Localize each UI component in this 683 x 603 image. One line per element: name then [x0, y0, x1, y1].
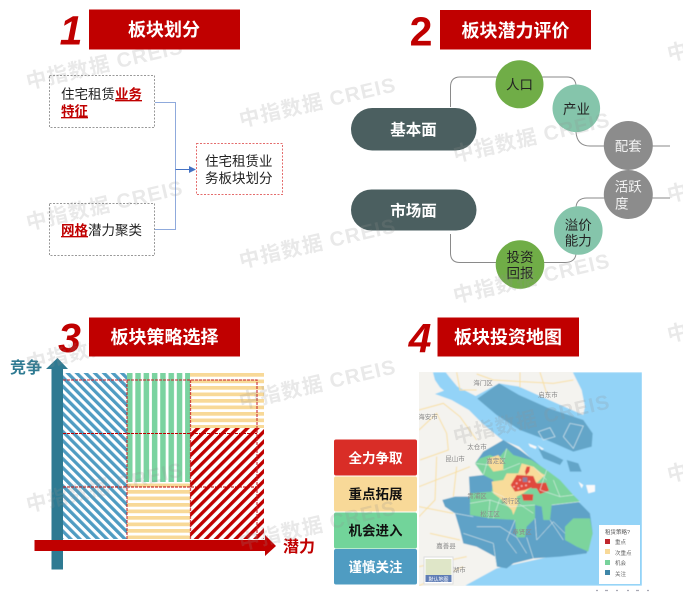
- box: 住宅租赁业务特征: 特征: [61, 103, 88, 119]
- legend button: 全力争取: 全力争取: [348, 450, 403, 466]
- map place labels: 昆山市: [445, 454, 465, 463]
- legend button: 机会进入: [334, 512, 417, 548]
- pill: 基本面: [351, 108, 476, 150]
- map legend: 租赁策略?: [605, 528, 630, 536]
- heading: 板块潜力评价: 板块潜力评价: [462, 21, 570, 41]
- inset: default map thumbnail: [424, 557, 453, 584]
- legend button: 谨慎关注: [334, 549, 417, 584]
- circle: 溢价能力: 溢价: [565, 218, 592, 233]
- box: 住宅租赁业务特征: [50, 76, 154, 128]
- circle: 配套: [604, 121, 653, 170]
- number 1: 1: [60, 8, 82, 54]
- map legend: [599, 525, 640, 584]
- circle: 投资回报: 投资: [506, 250, 534, 265]
- box: 住宅租赁业务板块划分: [196, 144, 282, 194]
- arrow: 竞争 axis: [46, 358, 68, 570]
- circle: 人口: [496, 60, 544, 108]
- watermark: 中指数据 CREIS: [451, 249, 612, 308]
- circle: 投资回报: [496, 240, 544, 289]
- panel: 4 板块投资地图: [334, 315, 658, 590]
- map legend: 次重点: [615, 549, 632, 557]
- watermark: 中指数据 CREIS: [237, 214, 398, 273]
- circle: 活跃度: 活跃: [615, 180, 642, 194]
- map place labels: 海门区: [473, 378, 493, 387]
- map place labels: 青浦区: [467, 491, 487, 500]
- watermark: 中指数据 CREIS: [451, 390, 612, 449]
- heading: 板块投资地图: 板块投资地图: [454, 328, 562, 348]
- panel: 1 板块划分: [50, 8, 282, 256]
- circle: 投资回报: 回报: [506, 266, 534, 281]
- pill: 市场面: [351, 190, 476, 230]
- map place labels: 奉贤区: [512, 527, 532, 536]
- legend button: 机会进入: 机会进入: [348, 522, 403, 538]
- panel: 3 板块策略选择: [10, 315, 315, 570]
- map place labels: 松江区: [480, 509, 500, 518]
- box: 住宅租赁业务板块划分: 务板块划分: [205, 171, 272, 186]
- legend button: 重点拓展: 重点拓展: [348, 486, 403, 502]
- watermark: 中指数据 CREIS: [237, 355, 398, 414]
- map place labels: 启东市: [538, 390, 558, 399]
- label: 潜力: 潜力: [283, 538, 315, 556]
- heading: 板块划分: 板块划分: [128, 20, 200, 40]
- watermark: 中指数据 CREIS: [24, 176, 185, 235]
- arrow: 潜力 axis: [34, 535, 276, 556]
- circle: 人口: 人口: [506, 78, 533, 92]
- heading: 板块划分: [89, 10, 240, 50]
- box: 住宅租赁业务特征: 住宅租赁业务: [61, 87, 142, 102]
- circle: 产业: 产业: [563, 102, 590, 117]
- heading: 板块策略选择: [89, 318, 240, 356]
- map place labels: 嘉定区: [486, 456, 506, 465]
- number 2: 2: [410, 8, 432, 54]
- circle: 配套: 配套: [615, 139, 642, 154]
- map legend: 关注: [615, 570, 627, 578]
- heading: 板块策略选择: 板块策略选择: [110, 328, 218, 348]
- map place labels: 嘉善县: [436, 541, 456, 550]
- circle: 活跃度: 度: [615, 196, 628, 212]
- watermark: 中指数据 CREIS: [24, 317, 185, 376]
- watermark: 中指数据 CREIS: [237, 496, 398, 555]
- watermark: 中指数据 CREIS: [24, 35, 185, 94]
- box: 住宅租赁业务板块划分: 住宅租赁业: [205, 154, 272, 169]
- cropped caption fragment: [596, 590, 658, 592]
- map place labels: 平湖市: [446, 565, 466, 574]
- panel: 2 板块潜力评价: [351, 8, 670, 289]
- map legend: 重点: [615, 538, 627, 546]
- box: 网格潜力聚类: 网格潜力聚类: [61, 222, 142, 238]
- inset: default map thumbnail: 默认地图: [428, 576, 449, 583]
- map place labels: 太仓市: [467, 442, 487, 451]
- box: 网格潜力聚类: [50, 204, 154, 256]
- arrow: connector to result: [155, 102, 196, 230]
- circle: 溢价能力: 能力: [565, 234, 592, 248]
- chart: strategy quadrant: [63, 373, 264, 539]
- circle: 产业: [552, 84, 600, 132]
- number 4: 4: [408, 315, 432, 361]
- map: Shanghai districts: [417, 370, 642, 587]
- map place labels: 闵行区: [501, 496, 521, 505]
- map place labels: [418, 378, 558, 574]
- legend button: 谨慎关注: 谨慎关注: [348, 559, 403, 575]
- heading: 板块潜力评价: [440, 10, 591, 50]
- circle: 溢价能力: [554, 206, 603, 255]
- connector lines: [450, 77, 670, 262]
- watermark: 中指数据 CREIS: [24, 458, 185, 517]
- label: 竞争: 竞争: [10, 358, 42, 377]
- watermark: 中指数据 CREIS: [237, 73, 398, 132]
- legend button: 重点拓展: [334, 476, 417, 512]
- legend button: 全力争取: [334, 440, 417, 476]
- pill: 市场面: 市场面: [390, 201, 437, 220]
- pill: 基本面: 基本面: [390, 121, 437, 139]
- circle: 活跃度: [604, 170, 653, 219]
- map place labels: 海安市: [418, 412, 438, 421]
- map legend: 机会: [615, 559, 627, 567]
- heading: 板块投资地图: [438, 318, 579, 356]
- number 3: 3: [58, 315, 81, 361]
- watermark: 中指数据 CREIS: [451, 108, 612, 167]
